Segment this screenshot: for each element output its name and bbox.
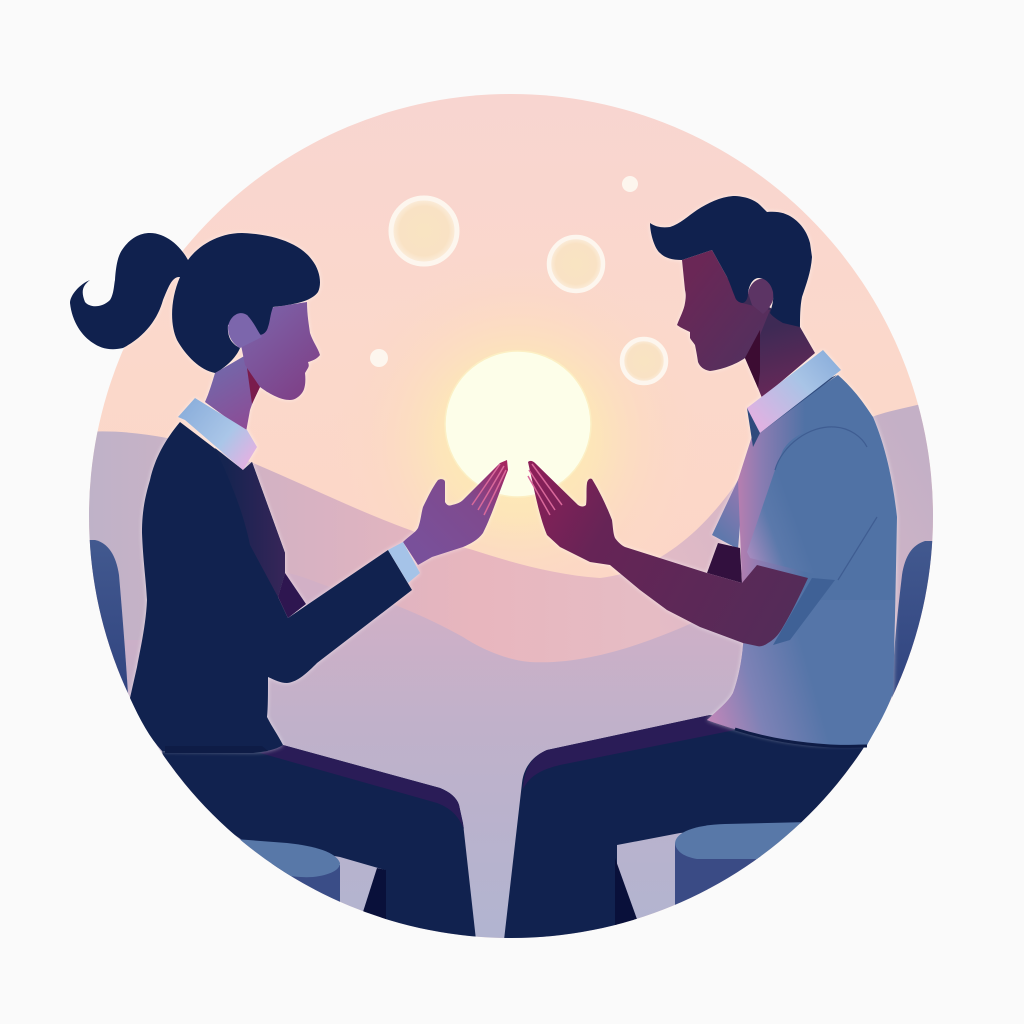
man: face — [677, 250, 770, 371]
man: shirt hem shadow — [735, 729, 867, 746]
woman: neck — [205, 355, 260, 432]
woman: legs — [162, 745, 476, 940]
stool: left seat — [235, 839, 340, 877]
woman: neck shadow — [247, 368, 260, 404]
chair: left back — [90, 540, 128, 693]
bubble: small left — [370, 349, 388, 367]
sun — [445, 351, 591, 497]
hill: front — [108, 604, 760, 938]
man — [528, 196, 897, 745]
bubble: large — [391, 198, 457, 264]
bubble: small top — [622, 176, 638, 192]
stool: right seat — [675, 822, 810, 859]
man: collar — [747, 350, 841, 447]
woman: hair and ponytail — [70, 233, 320, 373]
stool: right — [675, 822, 810, 908]
man: sleeve seam — [775, 427, 877, 580]
sun glow — [408, 324, 628, 542]
man: thigh shadow — [523, 715, 735, 789]
stool: left — [235, 839, 340, 905]
woman: face — [240, 302, 320, 400]
man: dark arm gap — [707, 543, 742, 583]
bubble: lower right — [622, 339, 666, 383]
woman: thigh shadow — [260, 745, 464, 829]
woman: hand — [403, 460, 508, 565]
man: collar band — [747, 350, 841, 433]
scene disc — [80, 90, 940, 940]
man: shirt lower — [707, 600, 895, 745]
woman: chest — [215, 448, 285, 597]
man: neck shadow — [745, 330, 760, 388]
bubble: medium — [549, 237, 603, 291]
woman: under-arm shadow — [278, 573, 306, 618]
woman — [70, 233, 508, 752]
chair: right back — [892, 541, 932, 698]
man: neck — [735, 285, 815, 398]
man: hair — [650, 196, 812, 327]
man: legs — [504, 715, 880, 940]
sky — [80, 90, 940, 940]
man: arm — [528, 461, 808, 646]
man: sleeve — [747, 428, 878, 580]
man: back sleeve — [712, 465, 745, 549]
man: stool leg — [615, 858, 637, 925]
man: arm shadow — [773, 578, 835, 645]
woman: stool leg — [363, 868, 386, 920]
woman: collar — [178, 398, 257, 470]
woman: jacket hem — [165, 746, 268, 753]
man: ear — [748, 279, 774, 314]
illustration: two people facing each other — [70, 94, 933, 938]
woman: cuff — [388, 542, 420, 583]
man: finger lines — [528, 464, 562, 515]
woman: finger lines — [472, 464, 506, 515]
hill: left back — [89, 431, 600, 697]
man: shirt body — [707, 375, 897, 745]
woman: ear — [228, 313, 262, 348]
woman: torso and jacket — [130, 422, 412, 752]
hill: right back — [600, 400, 940, 720]
